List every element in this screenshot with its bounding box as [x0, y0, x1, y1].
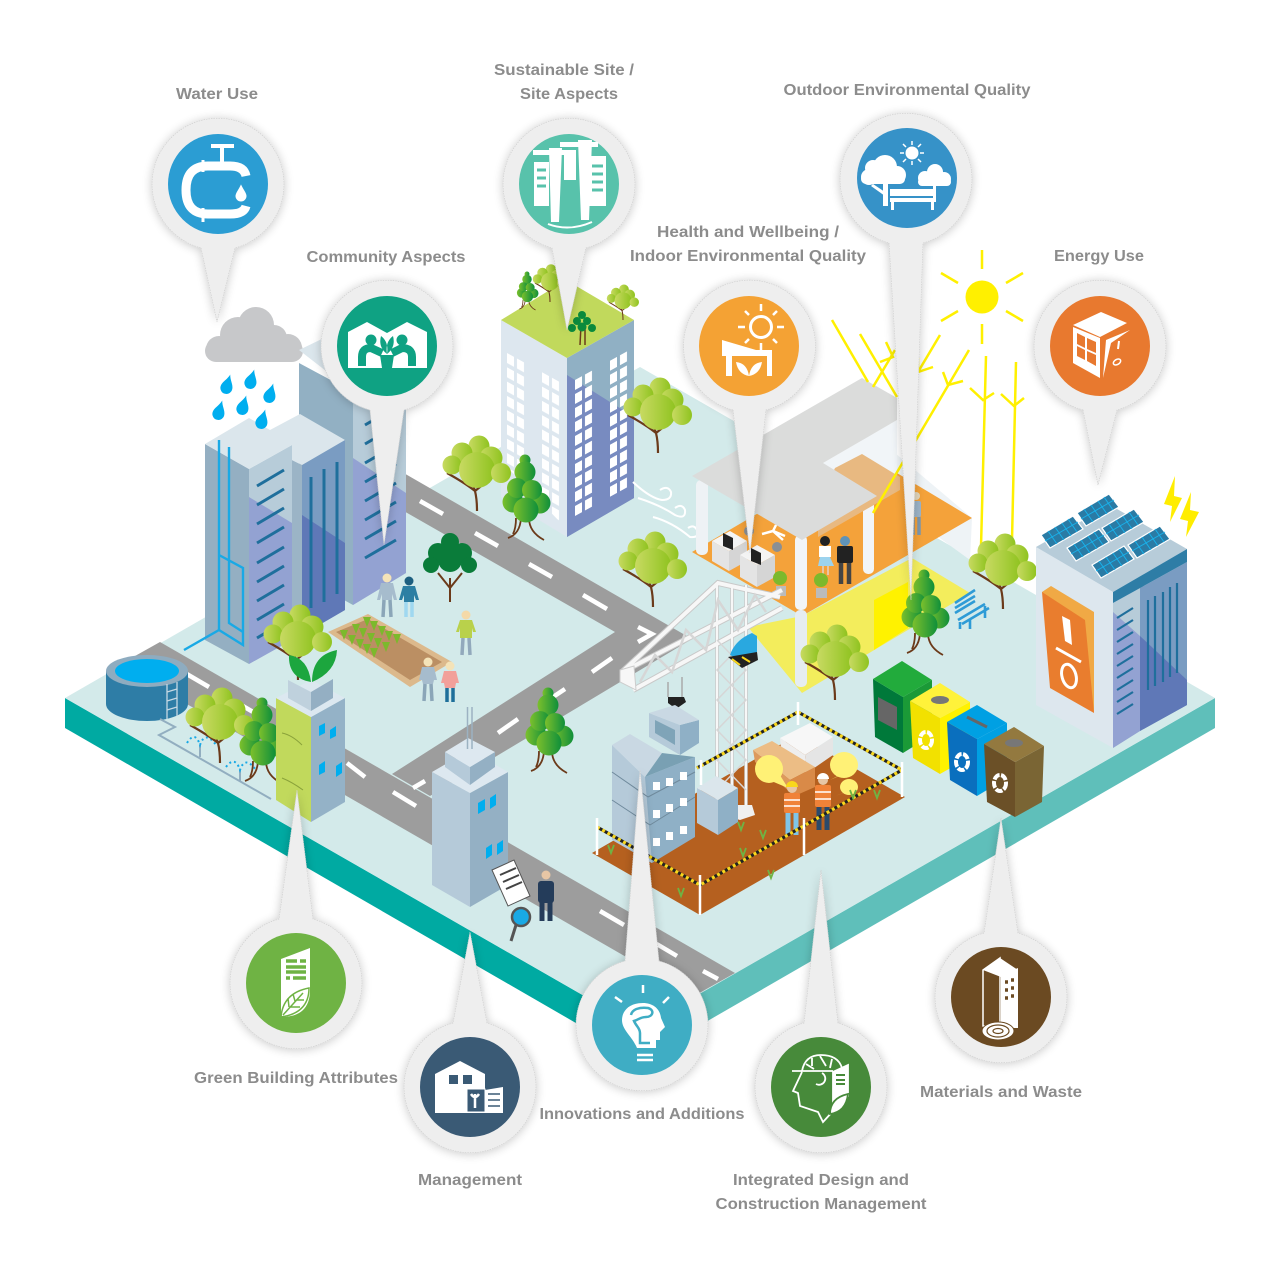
rooftop trees [517, 264, 639, 345]
wind swirls [633, 482, 698, 537]
label: Materials and Waste: Materials and Waste [920, 1084, 1082, 1101]
sun with rays [832, 250, 1024, 547]
grass sprouts [608, 790, 880, 896]
building: back tower [299, 336, 406, 605]
bench [955, 590, 989, 629]
speech bubbles [755, 752, 858, 796]
icon: log building [982, 958, 1018, 1040]
materials pallets [753, 723, 833, 798]
recycling bin: blue [947, 705, 1007, 796]
label: Integrated Design: Construction Management [716, 1196, 927, 1213]
inspector with blueprint and magnifier [492, 860, 554, 941]
grey roof [692, 378, 897, 540]
green wall building [276, 650, 345, 822]
pin: Green Building Attributes [230, 790, 362, 1049]
icon: people planting [348, 322, 427, 368]
label: Innovations and Additions: Innovations and Additions [540, 1106, 745, 1123]
icon: building with leaf [281, 948, 310, 1017]
tree group: right [800, 534, 1037, 700]
label: Sustainable Site [494, 62, 635, 103]
label: Sustainable Site: Sustainable Site / [494, 62, 635, 79]
pin: Materials and Waste [935, 818, 1067, 1063]
solar panels [1041, 494, 1170, 578]
lightning bolts [1164, 476, 1199, 537]
pin: Management [404, 932, 536, 1153]
rain drops [211, 368, 278, 430]
icon: house and manual [435, 1061, 503, 1113]
office desks and fan [712, 525, 785, 587]
pin: Innovations and Additions [576, 770, 708, 1091]
label: Management: Management [418, 1172, 523, 1189]
label: Health and Wellbeing [630, 224, 866, 265]
tree group: centre [442, 378, 692, 773]
pin: Health and Wellbeing [684, 280, 815, 553]
pin: Sustainable Site [503, 118, 635, 330]
fence rear [697, 712, 902, 770]
icon: sun table plant [722, 304, 784, 376]
recycling bin: yellow [910, 683, 970, 774]
construction workers [784, 773, 831, 835]
icon: buildings and trunks [533, 140, 606, 228]
modular building under construction [612, 705, 738, 863]
road network [119, 468, 735, 996]
health building white wall [860, 425, 972, 560]
label: Community Aspects: Community Aspects [306, 249, 466, 266]
rainwater pipes [184, 440, 243, 650]
dark round tree [423, 533, 477, 602]
management building [432, 707, 508, 907]
label: Sustainable Site: Site Aspects [520, 86, 618, 103]
label: Health and Wellbeing: Indoor Environmental Quality [630, 248, 866, 265]
pin: Integrated Design [755, 870, 887, 1153]
label: Water Use: Water Use [176, 86, 258, 103]
yellow ground [748, 558, 970, 693]
recycling bin: green [873, 661, 932, 753]
people in community [377, 574, 476, 702]
icon: water pipe [186, 146, 247, 222]
icon: trees bench sun [861, 141, 951, 210]
energy building [1036, 494, 1187, 748]
construction plot [592, 735, 905, 915]
community garden plot [328, 614, 452, 687]
icon: energy box [1073, 312, 1130, 378]
label: Energy Use: Energy Use [1054, 248, 1144, 265]
office couple [818, 536, 853, 584]
label: Outdoor Environmental Quality: Outdoor Environmental Quality [784, 82, 1031, 99]
potted plants [773, 571, 828, 598]
trees by tank [186, 604, 332, 783]
building: sustainable site tower [501, 280, 634, 537]
columns [696, 480, 874, 687]
fence front [597, 702, 902, 915]
label: Green Building Attributes: Green Building Attributes [194, 1070, 398, 1087]
icon: brain bulb [615, 985, 669, 1060]
water tank [106, 655, 188, 721]
label: Integrated Design [716, 1172, 927, 1213]
pin: Community Aspects [321, 280, 453, 545]
older person on terrace [911, 492, 921, 535]
bright yellow wall [874, 582, 908, 650]
upper terrace [818, 420, 900, 537]
building: water use tower [184, 414, 345, 664]
crane [620, 583, 782, 820]
pin: Outdoor Environmental Quality [840, 113, 972, 600]
leaf sprout [289, 650, 337, 682]
pin: Energy Use [1034, 280, 1166, 485]
platform base [65, 367, 1215, 1060]
power switch [1042, 586, 1094, 713]
orange floor [692, 452, 972, 616]
pin: Water Use [152, 118, 284, 322]
label: Health and Wellbeing: Health and Wellbeing / [657, 224, 840, 241]
rain cloud [205, 307, 303, 362]
crane cab [728, 633, 758, 668]
irrigation pipes [159, 719, 271, 799]
label: Integrated Design: Integrated Design and [733, 1172, 909, 1189]
recycling bin: brown [984, 727, 1044, 817]
sprinkler spray [187, 737, 256, 770]
icon: head with building and leaf [792, 1055, 848, 1122]
